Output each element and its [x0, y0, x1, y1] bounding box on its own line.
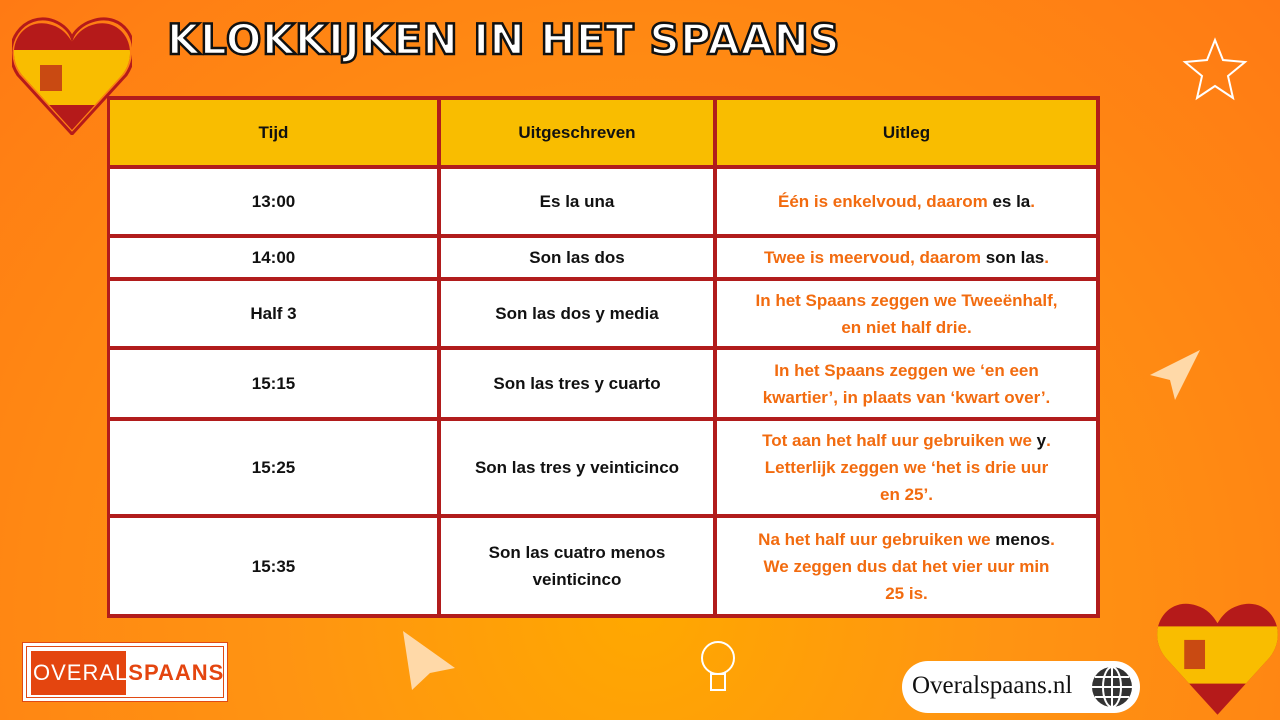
table: veinticinco — [533, 570, 621, 589]
title: KLOKKIJKEN IN HET SPAANS — [167, 15, 840, 64]
table: We zeggen dus dat het vier uur min — [764, 556, 1049, 576]
table: Letterlijk zeggen we ‘het is drie uur — [765, 458, 1048, 477]
table: Son las dos — [529, 248, 625, 267]
row 15:15: 15:15 — [252, 374, 295, 393]
row half 3: Half 3 — [250, 304, 297, 323]
row 15:15 — [110, 350, 437, 417]
table: kwartier’, in plaats van ‘kwart over’. — [763, 388, 1050, 406]
row 13:00 — [110, 169, 437, 234]
row 14:00 — [110, 238, 437, 277]
icon: heart flag top-left — [12, 17, 132, 135]
table: Tot aan het half uur gebruiken we y. — [762, 431, 1051, 450]
row 15:35: 15:35 — [252, 556, 295, 576]
row 13:00: 13:00 — [252, 192, 295, 211]
icon: heart flag bottom-right — [1157, 604, 1278, 714]
table — [107, 96, 1100, 618]
logo: Overal Spaans: OVERALSPAANS — [33, 660, 224, 685]
table: Na het half uur gebruiken we menos. — [758, 530, 1055, 548]
header row: Tijd — [259, 123, 288, 142]
row 15:25 — [110, 421, 437, 514]
table: Son las cuatro menos — [489, 543, 665, 562]
website badge — [902, 661, 1140, 713]
table: Uitgeschreven — [518, 123, 636, 142]
table: In het Spaans zeggen we ‘en een — [774, 360, 1039, 380]
table: Één is enkelvoud, daarom es la. — [778, 192, 1035, 211]
icon: paper plane right — [1150, 350, 1200, 400]
row 15:35 — [110, 518, 437, 614]
table: In het Spaans zeggen we Tweeënhalf, — [756, 290, 1057, 310]
website badge: Overalspaans.nl — [912, 672, 1072, 699]
table: Son las dos y media — [495, 304, 659, 323]
icon: globe — [1092, 667, 1132, 707]
row 14:00: 14:00 — [252, 248, 295, 267]
logo: Overal Spaans — [22, 642, 228, 702]
table: en 25’. — [880, 485, 933, 504]
table: Son las tres y cuarto — [493, 374, 661, 393]
icon: paper plane bottom — [403, 631, 455, 690]
table: Son las tres y veinticinco — [475, 458, 679, 477]
table: Uitleg — [883, 123, 930, 142]
row 15:25: 15:25 — [252, 458, 295, 477]
table: 25 is. — [885, 584, 928, 602]
table: Twee is meervoud, daarom son las. — [764, 248, 1049, 267]
table: en niet half drie. — [841, 318, 972, 336]
table: Es la una — [540, 192, 614, 211]
row half 3 — [110, 281, 437, 346]
icon: lightbulb — [701, 641, 735, 691]
header row — [110, 100, 437, 165]
icon: star — [1182, 37, 1248, 100]
